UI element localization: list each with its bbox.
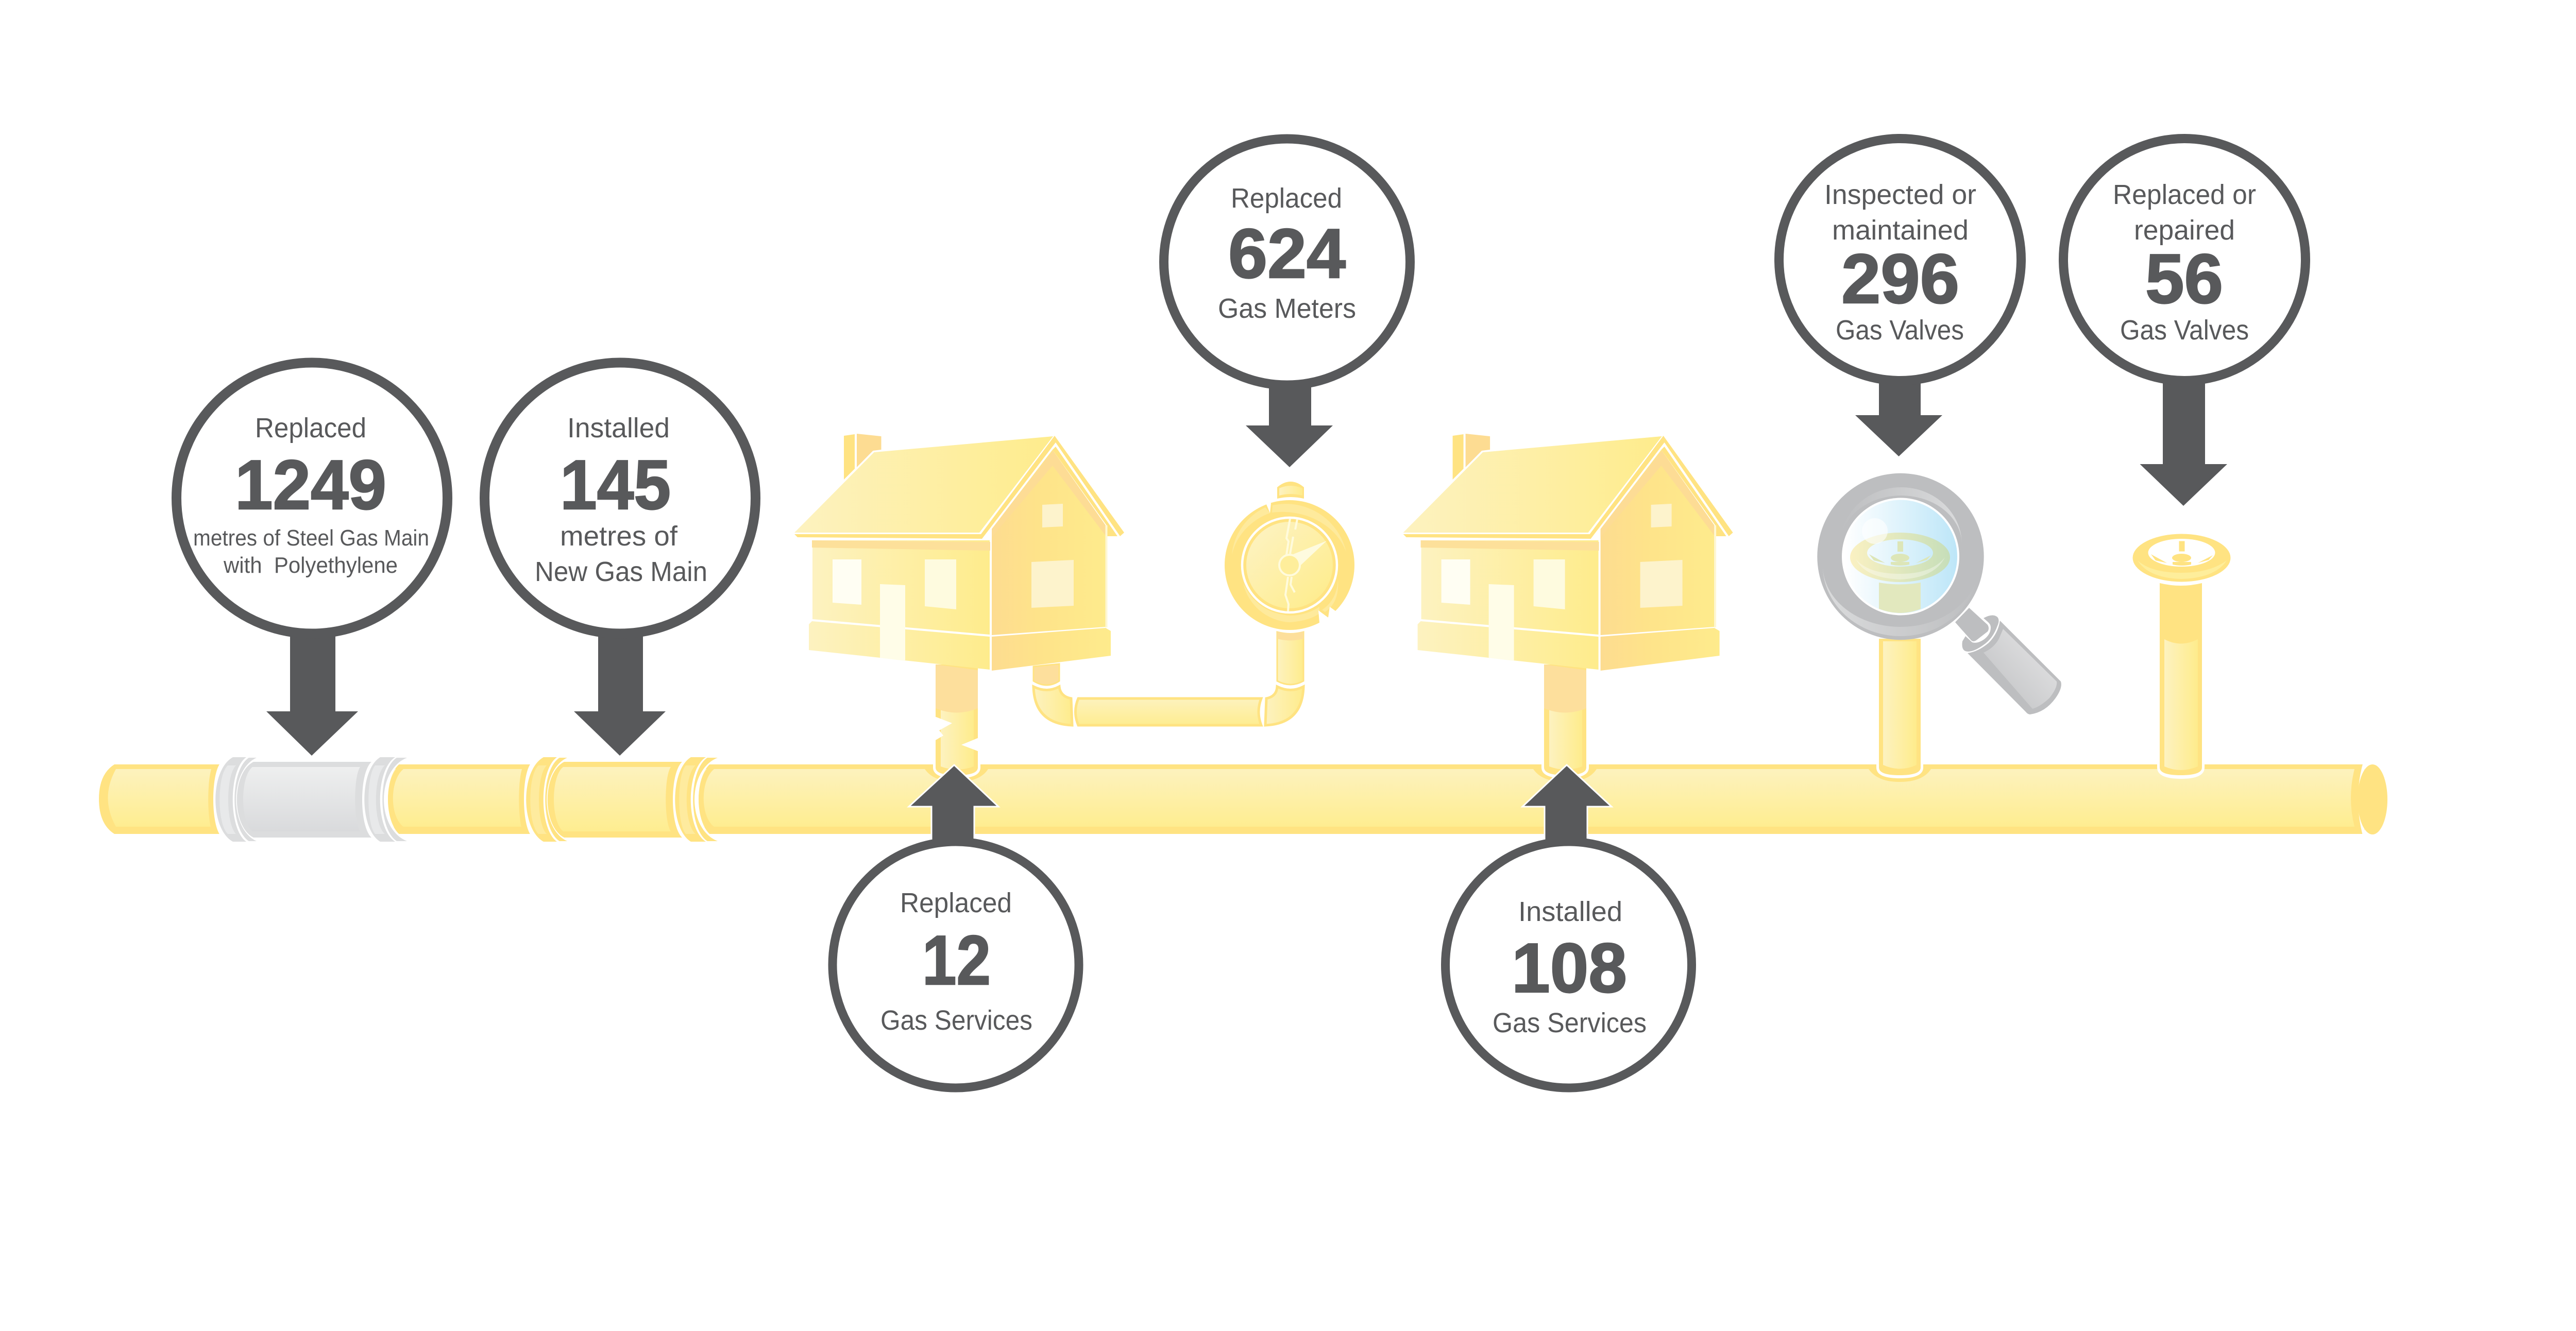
valve seen through lens: [1850, 533, 1950, 613]
arrow: [2140, 379, 2227, 506]
circle: [1446, 842, 1692, 1088]
chimney: [844, 434, 881, 480]
house 1: [794, 434, 1124, 671]
meter needle: [1293, 541, 1327, 565]
gas valve pipe: [2157, 583, 2205, 779]
circle: [2063, 139, 2306, 381]
description: Gas Services: [880, 1005, 1032, 1036]
gas service pipe to house 2: [1533, 664, 1597, 782]
label: Inspected or: [1824, 179, 1976, 210]
arrow: [1855, 379, 1942, 456]
number: 12: [922, 921, 991, 999]
magnifying glass over valve: [1817, 473, 2061, 714]
description: metres of: [560, 521, 678, 552]
circle: [833, 842, 1079, 1088]
pipe open end: [2358, 764, 2387, 834]
callout: replaced or repaired 56 gas valves: [2063, 139, 2306, 506]
description: Gas Valves: [1836, 315, 1964, 346]
label: Installed: [1518, 896, 1622, 927]
label: Replaced: [900, 888, 1012, 918]
house 2: [1403, 434, 1733, 671]
label: Replaced: [255, 413, 366, 443]
description line 2: with Polyethylene: [223, 553, 398, 578]
circle: [176, 363, 447, 634]
magnifier service pipe: [1869, 639, 1931, 782]
base: [809, 621, 990, 670]
callout: replaced 12 gas services: [833, 765, 1079, 1088]
number: 145: [560, 446, 671, 524]
meter connection pipe: [1033, 632, 1303, 725]
description: metres of Steel Gas Main: [193, 525, 429, 551]
windows and door: [833, 504, 1074, 661]
gas valve head: [2132, 533, 2232, 583]
label: Replaced: [1231, 183, 1342, 214]
front wall: [812, 540, 990, 635]
arrow: [909, 765, 998, 845]
rim: [1817, 473, 1984, 640]
pipe crack: [935, 717, 979, 752]
label: Replaced or: [2113, 179, 2256, 210]
number: 1249: [235, 446, 386, 524]
steel main section replaced with polyethylene: [208, 757, 412, 842]
arrow: [1522, 765, 1612, 845]
side wall: [992, 450, 1106, 635]
label line 2: maintained: [1832, 215, 1969, 246]
number: 108: [1512, 929, 1627, 1007]
label: Installed: [567, 413, 670, 443]
circle: [1164, 139, 1410, 385]
description: Gas Valves: [2120, 315, 2249, 346]
arrow: [266, 628, 358, 756]
callout: inspected or maintained 296 gas valves: [1779, 139, 2021, 456]
description line 2: New Gas Main: [535, 556, 707, 587]
gas service pipe to house 1 with cracks: [925, 664, 988, 782]
callout: replaced 624 gas meters: [1164, 139, 1410, 467]
main gas pipe: [99, 762, 2387, 837]
lens: [1842, 498, 1959, 615]
arrow: [1246, 381, 1333, 467]
roof: [794, 436, 1124, 539]
number: 624: [1228, 214, 1346, 293]
callout: replaced 1249 metres steel main: [176, 363, 447, 756]
gas meter: [1225, 482, 1354, 631]
meter cracks: [1266, 501, 1352, 631]
new polyethylene main section: [519, 757, 723, 842]
number: 56: [2145, 240, 2223, 318]
description: Gas Meters: [1218, 293, 1356, 324]
circle: [484, 363, 755, 634]
callout: installed 145 metres new main: [484, 363, 755, 756]
circle: [1779, 139, 2021, 381]
lens highlight: [1862, 518, 1888, 544]
handle: [1955, 608, 2061, 714]
arrow: [574, 628, 666, 756]
callout: installed 108 gas services: [1446, 765, 1692, 1088]
description: Gas Services: [1493, 1008, 1647, 1038]
label line 2: repaired: [2134, 215, 2235, 246]
number: 296: [1841, 240, 1959, 318]
